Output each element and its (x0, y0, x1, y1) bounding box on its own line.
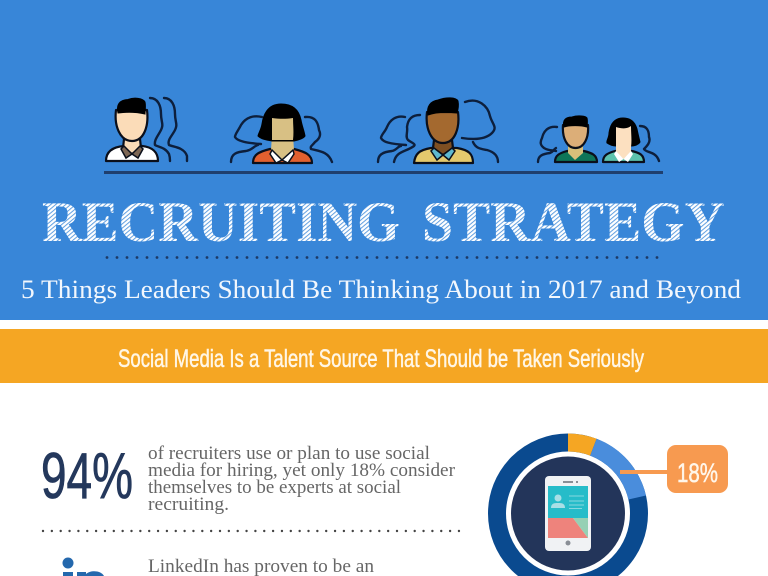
stat description: themselves to be experts at social (148, 477, 401, 498)
dotted divider (43, 530, 459, 532)
person group 1 (106, 98, 187, 161)
header panel (0, 0, 768, 320)
person group 4 (538, 116, 659, 162)
baseline rule (104, 171, 663, 174)
stat description: media for hiring, yet only 18% consider (148, 460, 456, 481)
stat: 94 percent: 94% (41, 439, 133, 512)
stat description: of recruiters use or plan to use social (148, 443, 430, 464)
stat description (148, 443, 456, 515)
icon: LinkedIn logo (62, 558, 104, 576)
title: STRATEGY (422, 191, 725, 254)
donut centre (511, 456, 625, 570)
callout: 18 percent: 18% (677, 458, 718, 488)
person group 2 (231, 104, 332, 163)
title dotted divider (107, 256, 658, 259)
icon: smartphone (545, 476, 591, 551)
person group 3 (378, 98, 498, 163)
stat description: recruiting. (148, 494, 229, 515)
title: RECRUITING (42, 191, 400, 254)
callout: 18 percent (667, 445, 728, 493)
callout connector (620, 470, 668, 474)
section banner (0, 329, 768, 383)
subtitle: 5 Things Leaders Should Be Thinking About in 2017 and Beyond (21, 275, 741, 304)
donut chart (497, 442, 639, 576)
donut segment: 18 percent (593, 447, 637, 498)
donut segment: orange (568, 442, 593, 447)
